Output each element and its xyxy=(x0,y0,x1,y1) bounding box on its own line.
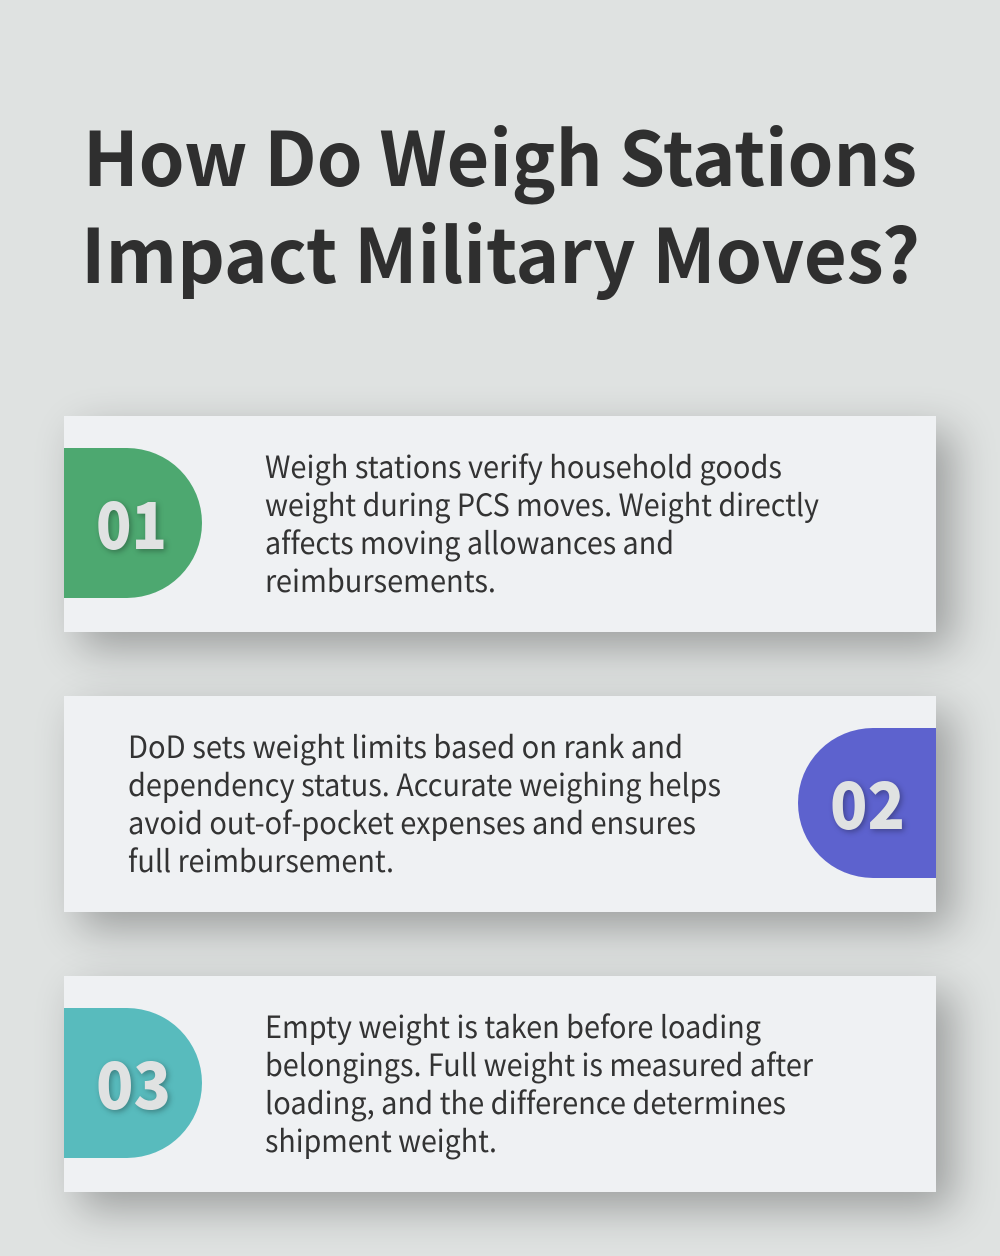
text: card 3 xyxy=(265,1003,813,1161)
text: card 1: affects moving allowances and xyxy=(265,519,674,563)
panel: card 1 xyxy=(64,416,936,632)
panel: card 2 xyxy=(64,696,936,912)
text: card 2: avoid out-of-pocket expenses and ensures xyxy=(128,799,696,843)
text: card 1: reimbursements. xyxy=(265,557,496,601)
title: Impact Military Moves? xyxy=(81,196,920,305)
number 01: 01 xyxy=(96,474,167,568)
panel: card 3 xyxy=(64,976,936,1192)
text: card 3: Empty weight is taken before loading xyxy=(265,1003,761,1047)
text: card 2: DoD sets weight limits based on rank and xyxy=(128,723,683,767)
text: card 3: shipment weight. xyxy=(265,1117,497,1161)
title: How Do Weigh Stations xyxy=(83,99,917,208)
text: card 1: weight during PCS moves. Weight directly xyxy=(265,481,819,525)
badge 2 xyxy=(798,728,936,878)
title xyxy=(81,99,920,305)
text: card 3: belongings. Full weight is measured after xyxy=(265,1041,813,1085)
text: card 2: dependency status. Accurate weighing helps xyxy=(128,761,721,805)
badge 3 xyxy=(64,1008,202,1158)
number 03: 03 xyxy=(96,1034,171,1128)
text: card 3: loading, and the difference determines xyxy=(265,1079,786,1123)
text: card 2 xyxy=(128,723,721,881)
number 02: 02 xyxy=(830,754,905,848)
badge 1 xyxy=(64,448,202,598)
text: card 1 xyxy=(265,443,819,601)
text: card 2: full reimbursement. xyxy=(128,837,394,881)
text: card 1: Weigh stations verify household goods xyxy=(265,443,782,487)
